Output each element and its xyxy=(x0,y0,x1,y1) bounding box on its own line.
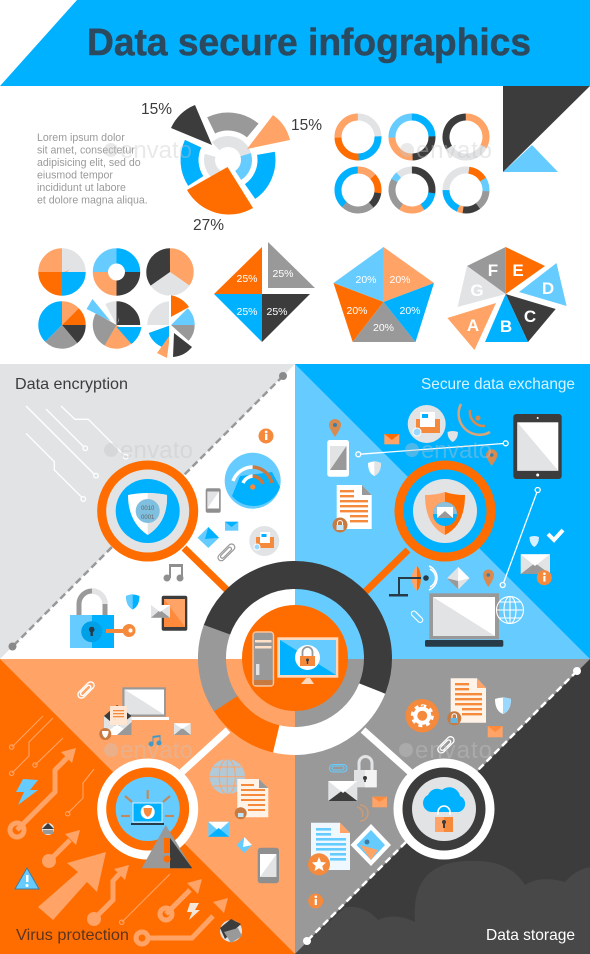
segment letters: B xyxy=(500,317,512,336)
icon: diamond mail xyxy=(198,527,219,548)
pie charts grid xyxy=(45,255,192,358)
watermarks: envato xyxy=(120,737,193,764)
cloud and lock xyxy=(423,787,465,832)
section heading: data storage: Data storage xyxy=(486,927,575,944)
magnifier: storage xyxy=(363,730,490,855)
icon: diamond blue xyxy=(236,837,252,853)
icon: signal storage xyxy=(357,805,368,821)
title: Data secure infographics xyxy=(87,22,531,64)
icon: diamond envelope xyxy=(447,567,470,590)
icon: small shield blue xyxy=(530,536,539,547)
intro text block: incididunt ut labore xyxy=(37,182,126,194)
circuit arrows: virus protection xyxy=(10,748,228,944)
magnifier: exchange xyxy=(364,465,491,593)
lettered segment chart xyxy=(447,247,567,350)
intro text block: adipisicing elit, sed do xyxy=(37,157,141,169)
icon: monitor with lock xyxy=(277,637,338,684)
icon: satellite dish xyxy=(389,566,437,596)
diamond percent labels xyxy=(236,268,294,318)
icon: paperclip xyxy=(217,543,236,562)
icon: music note blue xyxy=(148,735,162,746)
diamond percent labels: 25% xyxy=(272,268,294,280)
icon: paperclip storage xyxy=(436,735,455,754)
icon: shield xyxy=(368,461,381,476)
icon: lightning white xyxy=(187,903,200,920)
watermarks: envato xyxy=(120,437,193,464)
intro text block: et dolore magna aliqua. xyxy=(37,194,148,206)
segment letters: E xyxy=(512,261,524,280)
icon: document virus section xyxy=(235,779,268,819)
magnifier: virus protection xyxy=(102,730,228,855)
segment letters: D xyxy=(542,279,554,298)
diamond percent labels: 25% xyxy=(236,273,258,285)
central hub xyxy=(242,605,348,711)
watermarks xyxy=(104,137,492,764)
icon: desktop tower xyxy=(253,632,274,686)
diamond percent labels: 25% xyxy=(236,306,258,318)
watermarks: envato xyxy=(415,737,492,764)
icon: padlock storage xyxy=(354,757,377,787)
icon: large tablet xyxy=(513,414,562,479)
icon: laptop xyxy=(425,593,503,647)
big arrow xyxy=(38,852,106,920)
icon: bug large xyxy=(220,919,242,943)
ring charts grid xyxy=(330,110,494,218)
shield with binary: 0010 xyxy=(141,506,155,512)
storage clouds backdrop xyxy=(295,861,590,954)
watermarks: envato xyxy=(416,137,492,164)
connector line: tablet to laptop xyxy=(500,488,540,588)
icon: signal arcs xyxy=(459,404,490,435)
circuit lines: encryption xyxy=(26,406,128,501)
icon: check mark xyxy=(548,530,563,540)
icon: small envelope xyxy=(174,723,191,735)
icon: document with lock xyxy=(332,485,372,532)
percent labels: 15% xyxy=(291,117,322,134)
percent labels: 15% xyxy=(141,101,172,118)
intro text block: sit amet, consectetur xyxy=(37,144,135,156)
icon: document blue xyxy=(311,823,350,870)
segment letters: A xyxy=(467,316,479,335)
icon: lock badge xyxy=(447,711,461,725)
icon: lightning blue xyxy=(16,779,38,805)
pentagon percent labels xyxy=(346,274,421,334)
icon: gray phone xyxy=(258,848,279,883)
icon: document storage xyxy=(451,678,486,723)
four-part diamond chart xyxy=(214,242,315,342)
shield with binary xyxy=(128,493,167,535)
icon: envelope with document xyxy=(99,705,132,740)
dashed diagonal: storage xyxy=(303,667,581,945)
icon: pin xyxy=(329,419,341,437)
dashed diagonal: encryption xyxy=(8,372,287,650)
laptop with shield and arrows xyxy=(121,790,174,825)
section heading: virus protection: Virus protection xyxy=(16,927,129,944)
quadrant backgrounds xyxy=(0,364,590,954)
icon: padlock and key xyxy=(70,591,136,648)
icon: orange mail xyxy=(384,434,399,444)
segment letters: G xyxy=(470,281,484,300)
magnifier: encryption xyxy=(102,465,228,591)
icon: paperclip blue xyxy=(330,764,347,772)
icon: blue envelope xyxy=(208,822,229,837)
icon: orange envelope xyxy=(488,726,503,737)
corner ribbon fold xyxy=(503,86,590,172)
intro text block: Lorem ipsum dolor xyxy=(37,132,125,144)
section heading: data encryption: Data encryption xyxy=(15,376,128,393)
thin circuit lines: virus protection xyxy=(10,716,170,924)
icon: mail with info xyxy=(521,554,552,585)
section heading: secure data exchange: Secure data exchange xyxy=(421,376,575,393)
icon: globe virus section xyxy=(210,759,245,794)
pentagon percent labels: 20% xyxy=(355,274,377,286)
icon: envelope storage xyxy=(328,781,357,801)
exploded donut chart xyxy=(141,101,322,234)
watermarks: envato xyxy=(120,137,192,164)
shield with mail xyxy=(425,492,465,535)
icon: small shield white xyxy=(448,431,458,442)
icon: shield storage xyxy=(495,697,511,714)
icon: warning blue xyxy=(15,868,39,889)
icon: mail badge top xyxy=(408,405,446,443)
segment letters: C xyxy=(524,307,536,326)
icon: info xyxy=(258,428,274,444)
icon: pin lower xyxy=(483,570,494,587)
shield with binary: 0001 xyxy=(141,515,155,521)
diamond percent labels: 25% xyxy=(266,306,288,318)
segment letters: F xyxy=(488,261,498,280)
icon: music note xyxy=(164,564,184,582)
central ring xyxy=(180,543,410,773)
pentagon percent labels: 20% xyxy=(389,274,411,286)
icon: small mail xyxy=(225,522,238,531)
percent labels xyxy=(141,101,322,234)
icon: laptop virus section xyxy=(120,687,169,720)
icon: warning triangle xyxy=(142,825,192,868)
icon: gear badge xyxy=(406,699,439,732)
icon: info storage xyxy=(308,894,323,908)
percent labels: 27% xyxy=(193,217,224,234)
pentagon chart xyxy=(334,247,434,342)
icon: wifi badge xyxy=(225,453,281,509)
icon: pin right xyxy=(486,449,497,466)
icon: orange envelope lower xyxy=(372,797,387,807)
icon: white phone xyxy=(327,440,349,477)
pentagon percent labels: 20% xyxy=(399,305,421,317)
icon: mail badge xyxy=(249,526,279,556)
segment letters xyxy=(467,261,554,336)
icon: paperclip virus section xyxy=(76,680,96,700)
pentagon percent labels: 20% xyxy=(346,305,368,317)
pentagon percent labels: 20% xyxy=(373,322,394,334)
connector line: phone to tablet xyxy=(356,441,508,457)
icon: phone xyxy=(206,488,221,513)
icon: tablet with mail xyxy=(151,596,187,631)
intro text block: eiusmod tempor xyxy=(37,170,113,182)
icon: star badge xyxy=(308,853,330,875)
icon: bug small xyxy=(42,823,54,835)
watermarks: envato xyxy=(421,437,492,464)
title banner xyxy=(0,0,590,86)
icon: globe xyxy=(496,596,524,624)
icon: photo xyxy=(350,824,391,866)
icon: paperclip exchange xyxy=(410,610,424,623)
icon: small shield xyxy=(126,594,140,610)
